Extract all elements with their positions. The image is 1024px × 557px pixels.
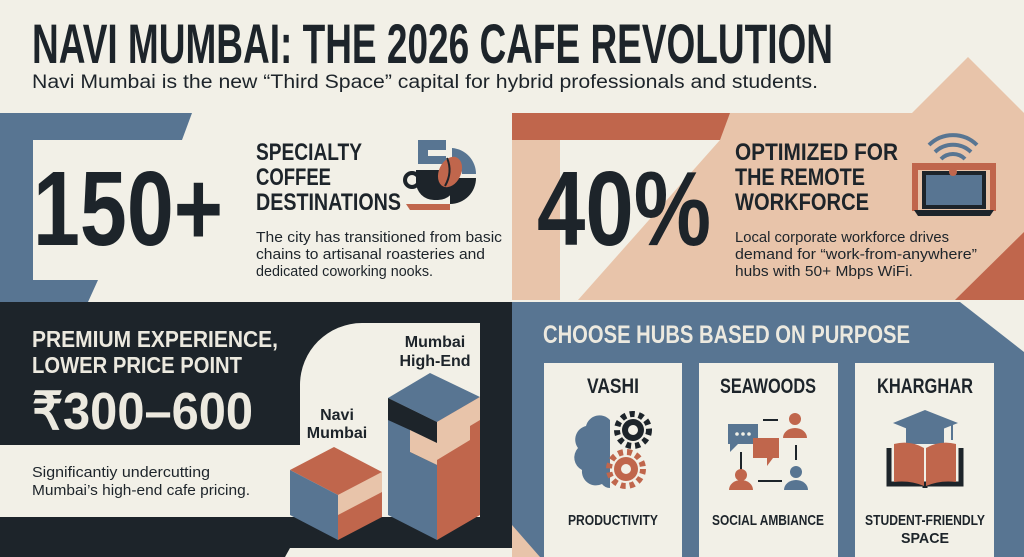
heading: specialty coffee <box>256 139 401 216</box>
heading: optimized: OPTIMIZED FOR <box>735 139 898 166</box>
heading: specialty coffee: DESTINATIONS <box>256 189 401 216</box>
label: mumbai high-end: High-End <box>399 353 471 370</box>
panel: price point <box>0 302 512 557</box>
panel: coffee destinations <box>0 113 502 302</box>
heading: choose hubs: CHOOSE HUBS BASED ON PURPOSE <box>543 321 910 349</box>
subtitle: Navi Mumbai is the new “Third Space” capital for hybrid professionals and students. <box>32 72 818 93</box>
heading: premium experience: LOWER PRICE POINT <box>32 352 242 378</box>
body text: demand for “work-from-anywhere” <box>735 247 977 263</box>
body text: hubs with 50+ Mbps WiFi. <box>735 264 913 280</box>
heading: optimized: WORKFORCE <box>735 189 869 216</box>
heading: specialty coffee: COFFEE <box>256 164 331 191</box>
icon: coffee cup <box>405 140 476 210</box>
label: navi mumbai: Mumbai <box>307 425 367 442</box>
card: kharghar: STUDENT-FRIENDLY <box>865 512 985 529</box>
card: seawoods <box>699 363 838 557</box>
card: seawoods: SOCIAL AMBIANCE <box>712 512 824 529</box>
body text: dedicated coworking nooks. <box>256 264 433 280</box>
body text <box>735 230 977 280</box>
icon: social people <box>728 413 808 490</box>
stat: 40%: 40% <box>537 150 711 268</box>
label: mumbai high-end: Mumbai <box>405 334 465 351</box>
icon: brain gears <box>574 414 649 488</box>
icon: laptop wifi <box>912 135 996 216</box>
label: navi mumbai: Navi <box>320 407 354 424</box>
body text: Local corporate workforce drives <box>735 230 949 246</box>
icon: graduation book <box>889 410 961 488</box>
body text: Significantiy undercutting <box>32 464 210 481</box>
card: seawoods: SEAWOODS <box>720 375 816 398</box>
body text <box>32 464 250 499</box>
heading: specialty coffee: SPECIALTY <box>256 139 362 166</box>
heading: optimized <box>735 139 898 216</box>
label: navi mumbai <box>307 407 367 442</box>
body text <box>256 230 502 280</box>
stat: price range: ₹300–600 <box>32 383 253 441</box>
stat: 150+: 150+ <box>33 150 223 268</box>
chart: cubes <box>290 373 480 540</box>
body text: The city has transitioned from basic <box>256 230 502 246</box>
body text: chains to artisanal roasteries and <box>256 247 485 263</box>
card: vashi <box>544 363 682 557</box>
panel: remote workforce <box>512 57 1024 300</box>
heading: premium experience <box>32 326 278 378</box>
card: vashi: VASHI <box>587 375 639 398</box>
label: mumbai high-end <box>399 334 471 370</box>
card: kharghar <box>855 363 994 557</box>
card: kharghar: SPACE <box>901 530 949 547</box>
heading: optimized: THE REMOTE <box>735 164 865 191</box>
heading: premium experience: PREMIUM EXPERIENCE, <box>32 326 278 352</box>
panel: hubs <box>512 302 1024 557</box>
card: vashi: PRODUCTIVITY <box>568 512 658 529</box>
body text: Mumbai’s high-end cafe pricing. <box>32 482 250 499</box>
card: kharghar: KHARGHAR <box>877 375 973 398</box>
